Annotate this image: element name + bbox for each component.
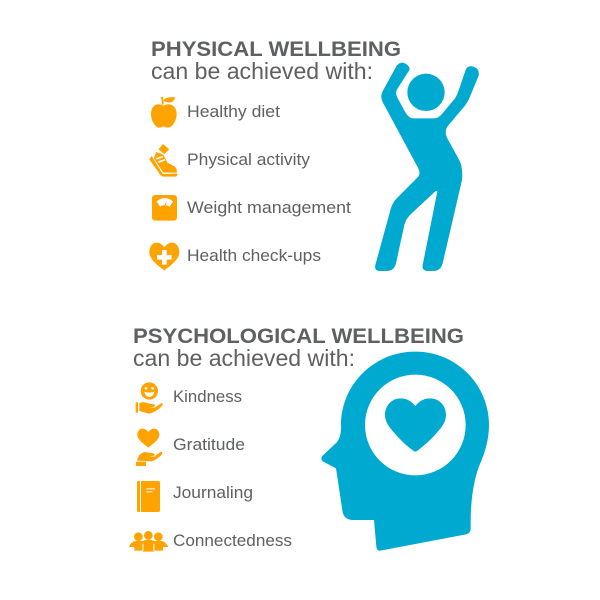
- list: physical wellbeing items: [149, 97, 351, 270]
- heading: physical wellbeing: PHYSICAL WELLBEING: [151, 38, 401, 61]
- label: gratitude: Gratitude: [173, 436, 245, 454]
- icon: smile over hand: [136, 382, 163, 414]
- icon: three people: [129, 531, 168, 552]
- icon: apple: [151, 97, 177, 128]
- icon: head with heart: [321, 352, 489, 551]
- icon: dancing person: [375, 63, 479, 271]
- label: healthy diet: Healthy diet: [187, 103, 280, 121]
- label: journaling: Journaling: [173, 484, 253, 502]
- label: physical activity: Physical activity: [187, 151, 311, 169]
- icon: heart with cross: [149, 243, 179, 270]
- heading: physical wellbeing: can be achieved with:: [151, 58, 373, 84]
- icon: running shoe: [149, 144, 177, 177]
- label: health check-ups: Health check-ups: [187, 247, 321, 265]
- heading: psychological wellbeing: can be achieved with:: [133, 345, 355, 371]
- list: psychological wellbeing items: [129, 382, 292, 552]
- label: weight management: Weight management: [187, 199, 351, 217]
- heading: physical wellbeing: [151, 38, 401, 84]
- label: connectedness: Connectedness: [173, 532, 292, 550]
- icon: journal: [137, 481, 160, 512]
- icon: heart over hand: [136, 429, 162, 466]
- icon: weight scale: [152, 195, 177, 221]
- label: kindness: Kindness: [173, 388, 242, 406]
- heading: psychological wellbeing: PSYCHOLOGICAL WELLBEING: [133, 325, 464, 348]
- heading: psychological wellbeing: [133, 325, 464, 371]
